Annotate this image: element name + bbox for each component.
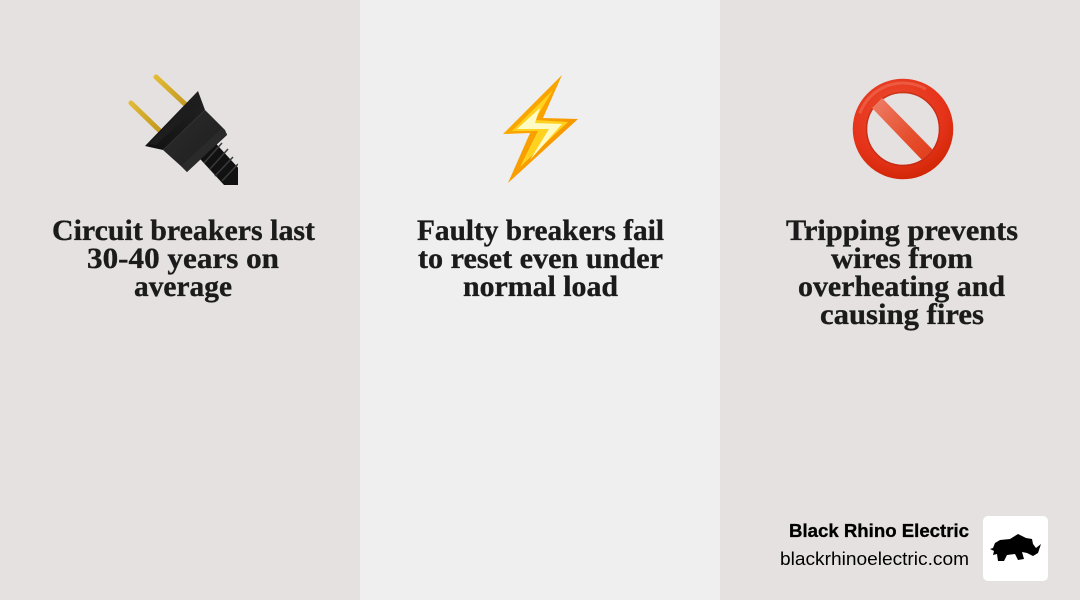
icon: prohibited sign (860, 83, 946, 172)
heading: circuit breakers last 30-40 years (52, 214, 315, 303)
heading: circuit breakers last 30-40 years: Circuit breakers last (52, 214, 315, 247)
heading: faulty breakers fail to reset (417, 214, 664, 303)
heading: faulty breakers fail to reset: normal load (463, 270, 618, 303)
icon: lightning bolt (503, 75, 578, 183)
heading: circuit breakers last 30-40 years: 30-40 years on (87, 242, 279, 275)
website url: blackrhinoelectric.com (780, 549, 969, 569)
icon: electric plug (128, 74, 238, 185)
heading: tripping prevents overheating: wires from (831, 242, 973, 275)
heading: tripping prevents overheating: Tripping prevents (786, 214, 1018, 247)
heading: faulty breakers fail to reset: Faulty breakers fail (417, 214, 664, 247)
brand name: Black Rhino Electric (789, 521, 969, 541)
heading: tripping prevents overheating (786, 214, 1018, 331)
logo: rhino (983, 516, 1048, 581)
panel: tripping prevents fires (720, 0, 1080, 600)
heading: faulty breakers fail to reset: to reset even under (418, 242, 663, 275)
heading: circuit breakers last 30-40 years: average (134, 270, 232, 303)
heading: tripping prevents overheating: causing fires (820, 298, 984, 331)
panel: breaker lifespan (53, 74, 315, 303)
heading: tripping prevents overheating: overheating and (798, 270, 1005, 303)
panel: faulty breakers (360, 0, 720, 600)
